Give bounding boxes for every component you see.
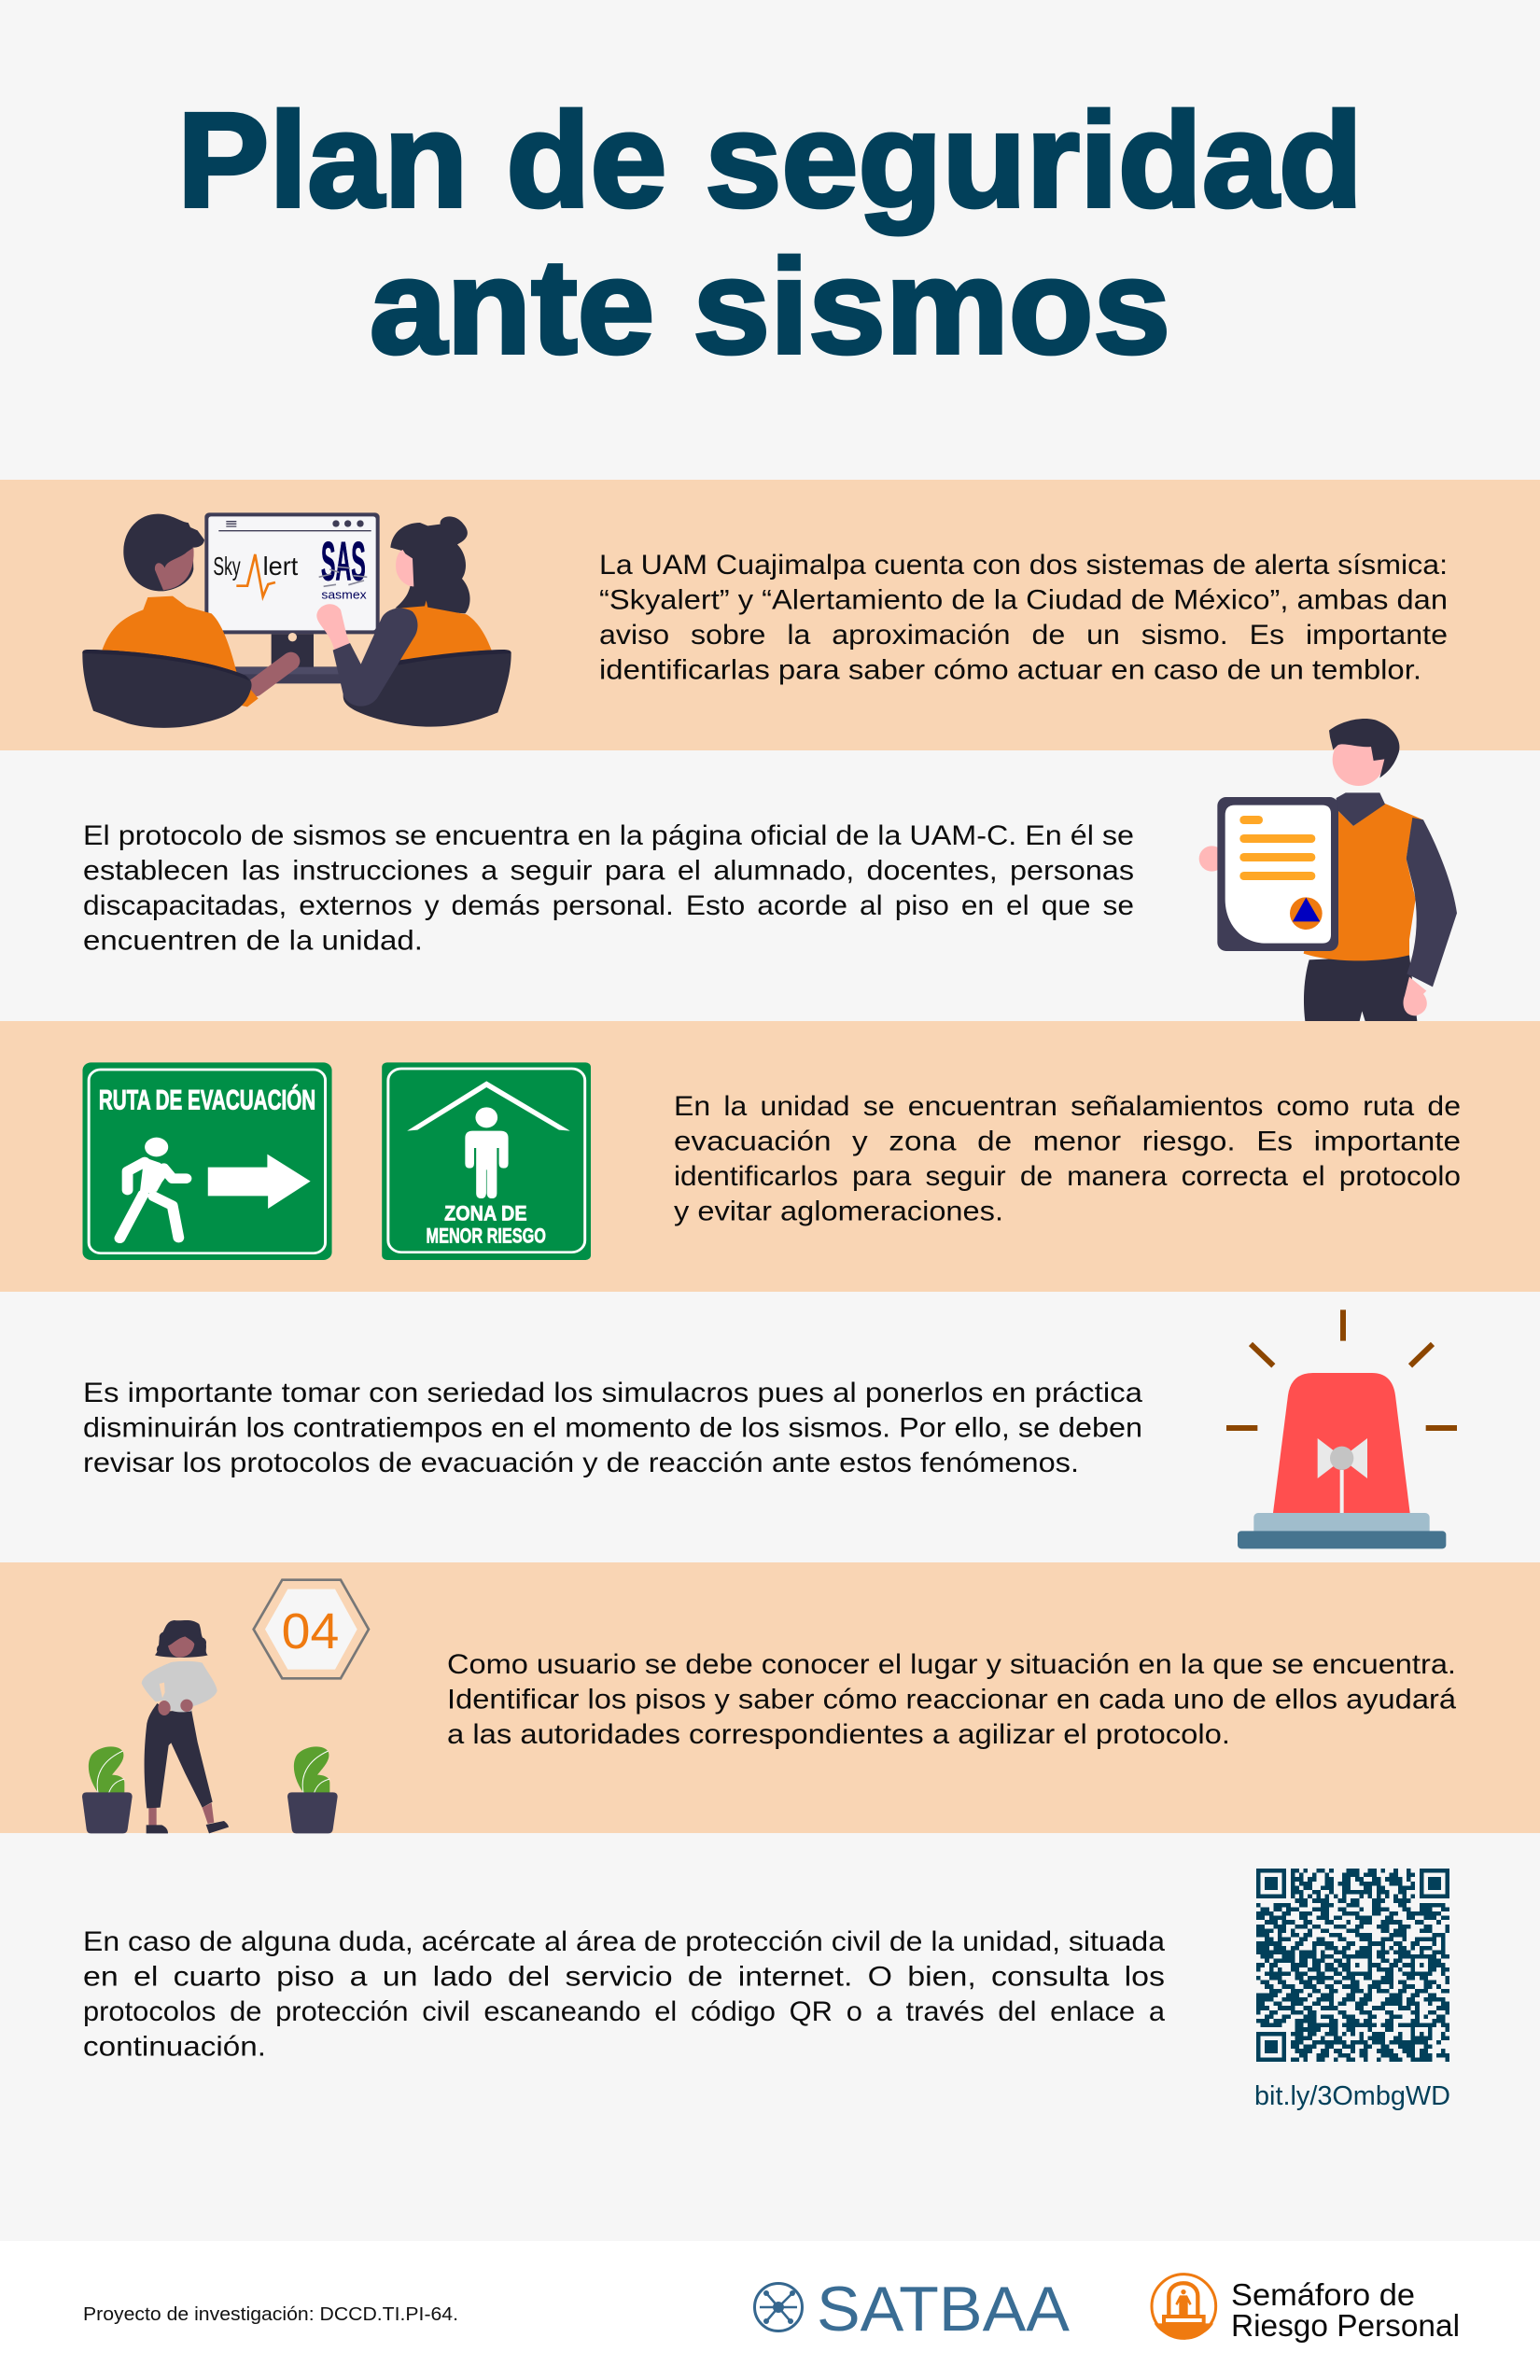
signs: [82, 1062, 591, 1260]
panel: contact and QR: [83, 1870, 1450, 2111]
title: ante sismos: [370, 231, 1170, 382]
text block: protocol: encuentren de la unidad.: [83, 926, 423, 956]
link text: bit.ly/3OmbgWD: [1254, 2081, 1450, 2111]
logo: Skyalert: lert: [263, 552, 299, 581]
icon: right plant: [287, 1746, 338, 1833]
panel: protocol band: [83, 719, 1457, 1021]
illustration: two people at monitor: SAS: [321, 532, 366, 593]
text block: contact: [83, 1926, 1165, 2063]
icon: lower risk zone sign: ZONA DE: [444, 1201, 527, 1225]
logo: Semáforo de Riesgo Personal: Semáforo de: [1231, 2277, 1415, 2312]
text block: drills: disminuirán los contratiempos en el momento de los sismos. Por ello, se deben: [83, 1413, 1142, 1443]
text block: drills: revisar los protocolos de evacuación y de reacción ante estos fenómenos.: [83, 1448, 1079, 1478]
text block: contact: En caso de alguna duda, acércate al área de protección civil de la unidad, situada: [83, 1926, 1165, 1957]
illustration: woman with plants and hexagon: [82, 1580, 369, 1833]
project reference: Proyecto de investigación: DCCD.TI.PI-64.: [83, 2304, 458, 2325]
text block: drills: [83, 1378, 1142, 1478]
icon: clipboard document: [1217, 797, 1338, 951]
text block: alert systems: La UAM Cuajimalpa cuenta con dos sistemas de alerta sísmica:: [599, 550, 1448, 581]
person: left man: [82, 514, 291, 728]
icon: lower risk zone sign: [382, 1062, 591, 1260]
logo: SAS sasmex: [319, 532, 367, 601]
text block: contact: continuación.: [83, 2031, 266, 2063]
icon: monitor: [204, 512, 380, 683]
text block: user awareness: a las autoridades correspondientes a agilizar el protocolo.: [447, 1719, 1230, 1750]
panel: user awareness band: [0, 1562, 1540, 1833]
title: Plan de seguridad: [177, 85, 1363, 235]
text block: signage: [674, 1091, 1461, 1226]
panel: alert systems band: [0, 480, 1540, 750]
icon: hexagon 04: [254, 1580, 369, 1678]
logo: Skyalert: Sky: [213, 552, 241, 581]
text block: protocol: El protocolo de sismos se encuentra en la página oficial de la UAM-C. En él se: [83, 820, 1134, 851]
title: [177, 85, 1363, 382]
logo: Semáforo de Riesgo Personal: Riesgo Personal: [1231, 2308, 1460, 2343]
panel: drills band: [83, 1309, 1457, 1548]
illustration: two people at monitor: [82, 512, 511, 728]
text block: user awareness: Identificar los pisos y saber cómo reaccionar en cada uno de ellos ayudará: [447, 1684, 1456, 1715]
text block: contact: protocolos de protección civil escaneando el código QR o a través del enlace a: [83, 1996, 1165, 2027]
text block: drills: Es importante tomar con seriedad los simulacros pues al ponerlos en práctica: [83, 1378, 1142, 1408]
text block: contact: en el cuarto piso a un lado del servicio de internet. O bien, consulta los: [83, 1962, 1165, 1992]
footer: [0, 2241, 1540, 2380]
illustration: man with clipboard: [1199, 719, 1457, 1021]
text block: user awareness: [447, 1649, 1456, 1750]
person: standing woman: [142, 1620, 229, 1833]
text block: user awareness: Como usuario se debe conocer el lugar y situación en la que se encuentra.: [447, 1649, 1456, 1680]
text block: protocol: establecen las instrucciones a seguir para el alumnado, docentes, personas: [83, 855, 1134, 887]
person: right woman: [316, 516, 511, 727]
text block: alert systems: [599, 550, 1448, 685]
logo: Semáforo de Riesgo Personal: [1152, 2275, 1460, 2343]
icon: siren: [1226, 1309, 1457, 1548]
icon: lower risk zone sign: MENOR RIESGO: [427, 1225, 546, 1247]
text block: protocol: discapacitadas, externos y demás personal. Esto acorde al piso en el que se: [83, 890, 1134, 921]
QR code: [1256, 1870, 1449, 2060]
panel: signage band: [0, 1021, 1540, 1292]
icon: evacuation route sign: RUTA DE EVACUACIÓN: [99, 1084, 315, 1115]
logo: SATBAA: SATBAA: [817, 2274, 1071, 2345]
text block: alert systems: aviso sobre la aproximación de un sismo. Es importante: [599, 620, 1448, 651]
logo: SAS sasmex: sasmex: [321, 587, 367, 601]
text block: signage: En la unidad se encuentran señalamientos como ruta de: [674, 1091, 1461, 1122]
icon: left plant: [82, 1746, 133, 1833]
text block: alert systems: identificarlas para saber cómo actuar en caso de un temblor.: [599, 655, 1421, 685]
text block: alert systems: “Skyalert” y “Alertamiento de la Ciudad de México”, ambas dan: [599, 584, 1448, 616]
text block: protocol: [83, 820, 1134, 956]
icon: hexagon 04: 04: [282, 1604, 339, 1659]
text block: signage: identificarlos para seguir de manera correcta el protocolo: [674, 1161, 1461, 1192]
text block: signage: evacuación y zona de menor riesgo. Es importante: [674, 1126, 1461, 1157]
icon: evacuation route sign: [82, 1062, 332, 1260]
text block: signage: y evitar aglomeraciones.: [674, 1197, 1003, 1226]
logo: Skyalert: [213, 552, 299, 596]
